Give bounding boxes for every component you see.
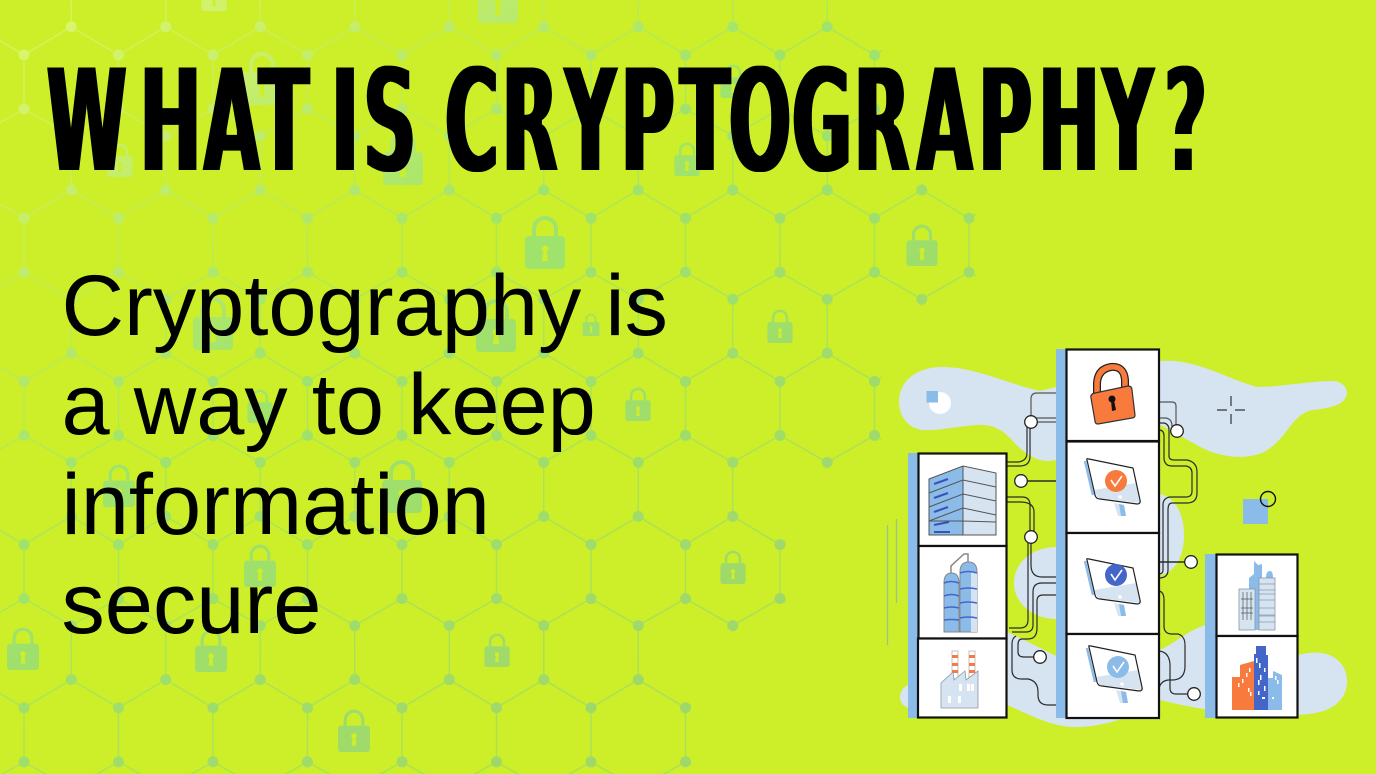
panel: left column of industrial buildings: [908, 453, 1006, 718]
connector wires: [1007, 393, 1197, 705]
icon: server building: [929, 466, 996, 535]
text block: definition: Cryptography is: [62, 258, 668, 354]
icon: storage tanks: [944, 554, 977, 632]
icon: monitor with blue check: [1085, 559, 1140, 616]
title: WHAT IS CRYPTOGRAPHY?: [46, 38, 1207, 207]
text block: definition: [62, 258, 668, 652]
decoration: crosshair: [1217, 396, 1245, 424]
text block: definition: secure: [62, 556, 321, 652]
decorative vertical lines: [888, 519, 896, 645]
icon: monitor with orange check: [1085, 459, 1140, 516]
panel: right column of city buildings: [1205, 554, 1298, 718]
text block: definition: information: [62, 457, 490, 553]
illustration: secure network of buildings: [888, 349, 1347, 727]
decoration: square and ring: [1243, 492, 1276, 524]
panel: centre column: [1056, 349, 1159, 718]
background blobs: [899, 361, 1347, 727]
connector nodes: [1015, 416, 1200, 700]
icon: factory: [941, 651, 978, 708]
background: hexagon network with padlocks: [0, 0, 976, 774]
icon: colourful city block: [1232, 646, 1282, 710]
icon: office towers: [1239, 561, 1275, 630]
decoration: circle and square: [926, 391, 951, 414]
text block: definition: a way to keep: [62, 357, 596, 453]
icon: orange padlock: [1091, 367, 1135, 424]
icon: monitor with light blue check: [1087, 646, 1142, 703]
